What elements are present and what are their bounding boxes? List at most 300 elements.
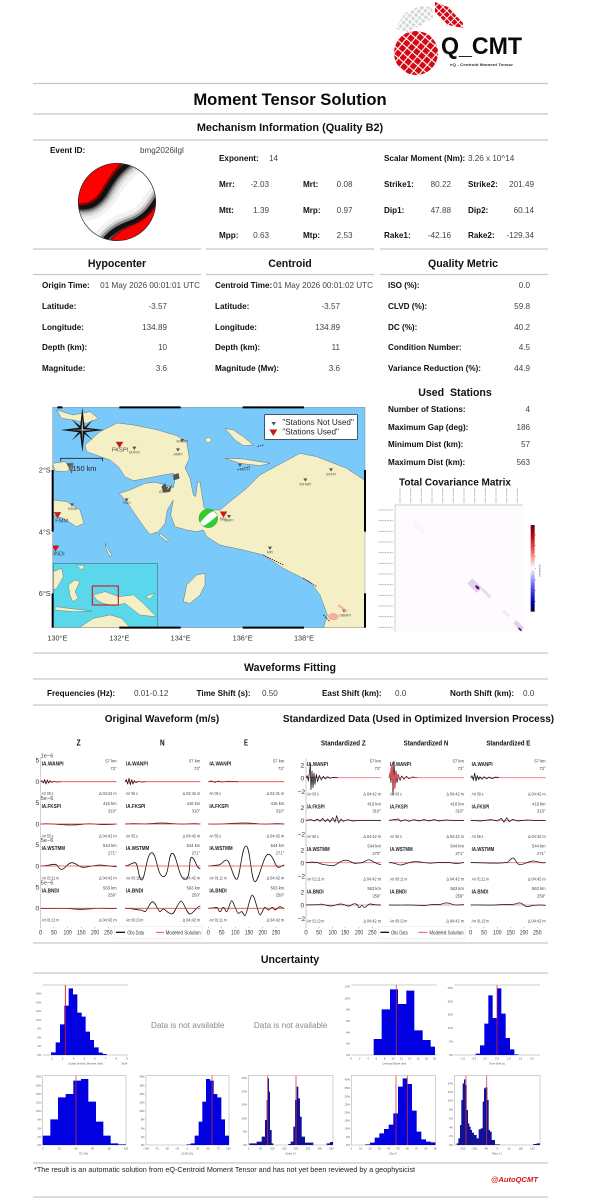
panel: used stations: Minimum Dist (km): bbox=[388, 440, 463, 449]
stations not used: YBYPI bbox=[240, 468, 250, 472]
histogram: dip: 30% bbox=[345, 1094, 351, 1098]
histogram: DC: 10% bbox=[36, 1109, 42, 1113]
chart: original waveforms: 5 bbox=[35, 800, 39, 807]
histogram: time shift: 0% bbox=[449, 1053, 454, 1057]
waveform: BNDI Z: IA.BNDI bbox=[42, 888, 59, 894]
histogram: DC: 15% bbox=[36, 1092, 42, 1096]
panel: hypocenter: Depth (km): bbox=[42, 343, 87, 352]
histogram: DC: 40 bbox=[75, 1147, 78, 1151]
heading: standardized data: Standardized Data (Used in Optimized Inversion Process) bbox=[283, 714, 554, 725]
waveform: standardized WSTMM E: IA.WSTMM bbox=[472, 847, 495, 853]
histogram: dip: 10 bbox=[359, 1147, 363, 1151]
histogram: strike: 25% bbox=[242, 1076, 248, 1080]
x axis ticks: 200 bbox=[520, 930, 529, 936]
waveform: WANPI N: Arr 09 s bbox=[126, 791, 138, 796]
note: data not available (ISO): Data is not available bbox=[151, 1021, 225, 1030]
legend: standardized waveform: Obs Data bbox=[391, 930, 408, 936]
legend: standardized waveform bbox=[378, 927, 465, 938]
waveform: standardized FKSPI E: 310° bbox=[537, 809, 546, 814]
panel: waveform fit parameters: Frequencies (Hz): bbox=[47, 689, 115, 698]
chart: standardized waveforms: 2 bbox=[300, 890, 304, 897]
panel: moment tensor values: 2.53 bbox=[337, 231, 353, 240]
panel: used stations: 186 bbox=[516, 423, 530, 432]
waveform: standardized WANPI N: Δ 04:42 m bbox=[446, 791, 464, 796]
waveform: standardized WSTMM N: IA.WSTMM bbox=[390, 847, 413, 853]
credit: @AutoQCMT: @AutoQCMT bbox=[491, 1175, 539, 1184]
x axis ticks: 250 bbox=[533, 930, 542, 936]
waveform: standardized FKSPI Z: 416 km bbox=[367, 801, 382, 806]
histogram: scalar seismic moment: 2 bbox=[51, 1056, 53, 1060]
title: Moment Tensor Solution bbox=[193, 90, 387, 109]
waveform: BNDI E: Arr 01:11 m bbox=[209, 918, 227, 923]
panel: waveform fit parameters: 0.0 bbox=[523, 689, 535, 698]
histogram: centroid depth bbox=[345, 985, 437, 1066]
chart: original waveforms: 0 bbox=[35, 863, 39, 870]
histogram: dip: 60 bbox=[406, 1147, 409, 1151]
panel: moment tensor values: 47.88 bbox=[431, 206, 451, 215]
chart: standardized waveforms: 2 bbox=[300, 762, 304, 769]
histogram: centroid depth: 10% bbox=[345, 996, 351, 1000]
waveform: FKSPI E: IA.FKSPI bbox=[209, 804, 229, 810]
waveform: WSTMM E: Arr 01:11 m bbox=[209, 875, 227, 880]
histogram: rake: 14% bbox=[448, 1081, 454, 1085]
waveform: standardized WANPI E: Arr 09 s bbox=[472, 791, 483, 796]
panel: moment tensor values: Mtp: bbox=[303, 231, 320, 240]
panel: hypocenter: Origin Time: bbox=[42, 281, 90, 290]
histogram: dip: 35% bbox=[345, 1086, 351, 1090]
histogram: CLVD: 5% bbox=[141, 1126, 145, 1130]
panel: centroid bbox=[215, 258, 373, 373]
waveform: WSTMM E: IA.WSTMM bbox=[209, 846, 233, 852]
map frame and tick labels: 2°S bbox=[39, 466, 51, 475]
panel: quality metric: DC (%): bbox=[388, 323, 417, 332]
waveform: WANPI N: 57 km bbox=[189, 759, 201, 764]
histogram: dip: 0% bbox=[346, 1143, 351, 1147]
histogram: centroid depth: 12 bbox=[400, 1056, 403, 1060]
chart: original waveforms: 5 bbox=[35, 884, 39, 891]
panel: used stations: Used Stations bbox=[418, 387, 492, 399]
stations not used: FAKI bbox=[123, 501, 131, 505]
panel: centroid: -3.57 bbox=[321, 302, 340, 311]
waveform: BNDI N: 563 km bbox=[187, 885, 201, 890]
waveform: WANPI N: Δ 04:42 m bbox=[183, 791, 201, 796]
histogram: rake: −100 bbox=[471, 1147, 478, 1151]
waveform: standardized BNDI E: 563 km bbox=[532, 886, 546, 891]
land: New Guinea bbox=[85, 423, 367, 628]
waveform: standardized WSTMM E bbox=[471, 844, 546, 881]
histogram: CLVD: 8% bbox=[141, 1118, 145, 1122]
waveform: standardized FKSPI E bbox=[471, 801, 546, 839]
waveform: standardized WANPI Z: IA.WANPI bbox=[307, 762, 328, 768]
panel: event id and beachball: Event ID: bbox=[50, 146, 85, 155]
panel: hypocenter: -3.57 bbox=[148, 302, 167, 311]
panel: centroid: 11 bbox=[332, 343, 340, 352]
waveform: WSTMM Z: Arr 01:11 m bbox=[42, 875, 59, 880]
panel: quality metric: ISO (%): bbox=[388, 281, 420, 290]
icon: event beachball bbox=[199, 509, 218, 528]
histogram: centroid depth: Centroid Depth (km) bbox=[382, 1062, 406, 1066]
waveform: WANPI E: Δ 04:41 m bbox=[267, 791, 285, 796]
histogram: time shift: 15% bbox=[448, 1013, 454, 1017]
map frame and tick labels bbox=[39, 407, 365, 642]
waveform: WSTMM Z bbox=[41, 843, 117, 880]
histogram: scalar seismic moment: 5 bbox=[84, 1056, 86, 1060]
histogram: CLVD: 20% bbox=[139, 1075, 145, 1079]
histogram: rake: 0% bbox=[449, 1143, 454, 1147]
panel: moment tensor values: -42.16 bbox=[428, 231, 451, 240]
waveform: standardized WSTMM E: 271° bbox=[537, 851, 546, 856]
panel: quality metric: 40.2 bbox=[514, 323, 530, 332]
chart: original waveforms: 1e−6 bbox=[41, 754, 53, 760]
x axis ticks: 250 bbox=[104, 930, 113, 936]
stations not used: MTMPI bbox=[299, 482, 311, 486]
waveform: FKSPI N bbox=[125, 801, 201, 838]
waveform: standardized WANPI Z: 57 km bbox=[370, 759, 382, 764]
waveform: WSTMM E: Δ 04:42 m bbox=[267, 875, 285, 880]
chart: standardized waveforms: −2 bbox=[298, 831, 305, 838]
histogram: dip: 20% bbox=[345, 1110, 351, 1114]
waveform: BNDI Z: 259° bbox=[108, 893, 117, 898]
stations not used: MPI bbox=[267, 551, 273, 555]
waveform: standardized FKSPI E: IA.FKSPI bbox=[472, 805, 490, 811]
stations not used bbox=[68, 439, 351, 618]
histogram: DC: 18% bbox=[36, 1083, 42, 1087]
histogram: centroid depth: 6% bbox=[346, 1019, 351, 1023]
waveform: standardized WANPI Z: 73° bbox=[375, 766, 381, 771]
panel: quality metric: 59.8 bbox=[514, 302, 530, 311]
map frame and tick labels: 132°E bbox=[109, 633, 129, 642]
waveform: BNDI N: 259° bbox=[192, 893, 201, 898]
chart: standardized waveforms: 0 bbox=[300, 776, 304, 783]
histogram: scalar seismic moment: Scalar Seismic Moment (Nm) bbox=[68, 1062, 103, 1066]
histogram: rake: 150 bbox=[530, 1147, 535, 1151]
land: other islands bbox=[53, 410, 330, 622]
waveform: WSTMM N: Δ 04:42 m bbox=[183, 875, 201, 880]
histogram: time shift: 25% bbox=[448, 986, 454, 990]
waveform: standardized BNDI Z: Arr 01:13 m bbox=[307, 919, 325, 924]
x axis ticks: 250 bbox=[368, 930, 377, 936]
waveform: standardized FKSPI E: Δ 04:42 m bbox=[528, 834, 546, 839]
chart: original waveforms: 0 bbox=[35, 779, 39, 786]
histogram: centroid depth: 0 bbox=[351, 1056, 353, 1060]
chart: total covariance matrix bbox=[378, 477, 542, 632]
histogram: scalar seismic moment bbox=[36, 985, 128, 1066]
waveform: standardized BNDI N: 259° bbox=[455, 893, 464, 898]
histogram: time shift bbox=[448, 985, 540, 1066]
waveform: standardized WSTMM E: 544 km bbox=[532, 844, 546, 849]
histogram: scalar seismic moment: 12% bbox=[36, 1009, 42, 1013]
panel: moment tensor values: Rake1: bbox=[384, 231, 411, 240]
waveform: standardized FKSPI N: IA.FKSPI bbox=[390, 805, 408, 811]
histogram: dip: 80 bbox=[425, 1147, 428, 1151]
histogram: CLVD: 15% bbox=[139, 1092, 145, 1096]
panel: moment tensor values: Dip1: bbox=[384, 206, 404, 215]
panel: moment tensor values: 1.39 bbox=[253, 206, 269, 215]
panel: centroid: Centroid Time: bbox=[215, 281, 272, 290]
histogram: dip: 40% bbox=[345, 1078, 351, 1082]
stations not used: SATPI bbox=[326, 472, 336, 476]
panel: moment tensor values: 60.14 bbox=[514, 206, 534, 215]
panel: centroid: Depth (km): bbox=[215, 343, 260, 352]
histogram: DC: DC (%) bbox=[79, 1152, 88, 1156]
waveform: standardized WSTMM N: Δ 04:42 m bbox=[446, 876, 464, 881]
histogram: centroid depth: 8 bbox=[384, 1056, 386, 1060]
panel: centroid: 3.6 bbox=[329, 364, 340, 373]
legend: "Stations Used" bbox=[282, 427, 339, 436]
panel: quality metric bbox=[388, 258, 530, 373]
histogram: centroid depth: 4% bbox=[346, 1030, 351, 1034]
chart: standardized waveforms: 0 bbox=[300, 860, 304, 867]
map frame and tick labels: 134°E bbox=[171, 633, 191, 642]
histogram: time shift: Time Shift (s) bbox=[489, 1062, 505, 1066]
waveform: WANPI N: IA.WANPI bbox=[126, 762, 148, 768]
waveform: BNDI E: Δ 04:42 m bbox=[267, 918, 285, 923]
waveform: WSTMM E: 271° bbox=[276, 850, 285, 855]
waveform: standardized WANPI Z: Δ 04:42 m bbox=[363, 791, 381, 796]
panel: uncertainty histograms right bbox=[345, 985, 540, 1156]
waveform: WANPI Z: 73° bbox=[110, 766, 117, 771]
stations not used: OBMPI bbox=[339, 614, 351, 618]
waveform: FKSPI Z: IA.FKSPI bbox=[42, 804, 61, 810]
stations used bbox=[52, 442, 227, 551]
panel: moment tensor values: Strike1: bbox=[384, 180, 414, 189]
panel: quality metric: Variance Reduction (%): bbox=[388, 364, 481, 373]
histogram: scalar seismic moment: 3 bbox=[62, 1056, 64, 1060]
waveform: standardized FKSPI N: 310° bbox=[455, 809, 464, 814]
waveform: standardized BNDI E: Arr 01:13 m bbox=[472, 919, 489, 924]
chart: standardized waveforms: 0 bbox=[300, 903, 304, 910]
waveform: WSTMM Z: IA.WSTMM bbox=[42, 846, 65, 852]
panel: waveform fit parameters: Time Shift (s): bbox=[196, 689, 251, 698]
histogram: time shift: 2.0 bbox=[530, 1056, 534, 1060]
chart: original waveforms: Z bbox=[77, 739, 81, 748]
chart: standardized waveforms: −2 bbox=[298, 789, 305, 796]
heading: uncertainty: Uncertainty bbox=[261, 954, 319, 966]
waveform: BNDI Z: 563 km bbox=[103, 885, 117, 890]
map: station locations: FMM bbox=[55, 518, 68, 524]
waveform: standardized BNDI N: IA.BNDI bbox=[390, 889, 407, 895]
x axis ticks: 150 bbox=[77, 930, 86, 936]
waveform: standardized FKSPI N: Δ 04:42 m bbox=[446, 834, 464, 839]
chart: original waveforms bbox=[35, 739, 285, 938]
histogram: rake: 0 bbox=[497, 1147, 499, 1151]
stations not used: BMPI bbox=[225, 518, 233, 522]
panel: used stations: Maximum Gap (deg): bbox=[388, 423, 468, 432]
map frame and tick labels: 138°E bbox=[294, 633, 314, 642]
histogram: centroid depth: 14 bbox=[408, 1056, 412, 1060]
waveform: FKSPI Z: Δ 04:42 m bbox=[99, 833, 117, 838]
waveform: FKSPI N: Arr 55 s bbox=[126, 833, 138, 838]
x axis ticks: 50 bbox=[219, 930, 225, 936]
x axis ticks: 0 bbox=[469, 930, 473, 936]
histogram: strike: 200 bbox=[294, 1147, 299, 1151]
waveform: WSTMM Z: 271° bbox=[108, 850, 117, 855]
panel: waveform fit parameters: 0.01-0.12 bbox=[134, 689, 169, 698]
x axis ticks: 150 bbox=[341, 930, 350, 936]
histogram: centroid depth: 18 bbox=[425, 1056, 428, 1060]
histogram: time shift: 0.5 bbox=[495, 1056, 499, 1060]
chart: total covariance matrix: Total Covariance Matrix bbox=[399, 477, 511, 488]
panel: moment tensor values: Exponent: bbox=[219, 154, 259, 163]
x axis ticks: 100 bbox=[231, 930, 240, 936]
panel: waveform fit parameters: 0.50 bbox=[262, 689, 278, 698]
waveform: standardized BNDI Z: 563 km bbox=[367, 886, 382, 891]
waveform: BNDI E bbox=[208, 885, 285, 923]
histogram: DC: 8% bbox=[37, 1118, 42, 1122]
panel: waveform fit parameters: East Shift (km): bbox=[322, 689, 382, 698]
legend: original waveform: Modeled Solution bbox=[166, 930, 201, 936]
x axis ticks: 100 bbox=[328, 930, 337, 936]
x axis ticks: 50 bbox=[316, 930, 322, 936]
panel: event id and beachball bbox=[50, 147, 184, 241]
panel: event id and beachball: bmg2026ilgl bbox=[140, 146, 184, 155]
histogram: CLVD: 0% bbox=[141, 1143, 145, 1147]
histogram: dip: 40 bbox=[387, 1147, 391, 1151]
histogram: time shift: 1.5 bbox=[518, 1056, 523, 1060]
waveform: standardized FKSPI Z: IA.FKSPI bbox=[307, 805, 325, 811]
waveform: FKSPI Z bbox=[41, 801, 117, 838]
waveform: BNDI Z: Arr 01:13 m bbox=[42, 918, 59, 923]
waveform: standardized BNDI E: Δ 04:42 m bbox=[528, 919, 546, 924]
chart: standardized waveforms: 2 bbox=[300, 847, 304, 854]
waveform: standardized BNDI N bbox=[389, 886, 465, 924]
histogram: CLVD: −75 bbox=[154, 1147, 159, 1151]
panel: moment tensor values: Mrp: bbox=[303, 206, 321, 215]
chart: original waveforms: 5 bbox=[35, 842, 39, 849]
histogram: rake: 50 bbox=[508, 1147, 511, 1151]
waveform: FKSPI E: 310° bbox=[276, 808, 285, 813]
panel: used stations: 57 bbox=[521, 440, 530, 449]
chart: standardized waveforms: Standardized N bbox=[404, 738, 448, 747]
chart: original waveforms: 5e−6 bbox=[41, 796, 53, 802]
histogram: CLVD: 25 bbox=[196, 1147, 200, 1151]
histogram: DC: 0 bbox=[42, 1147, 44, 1151]
waveform: standardized WSTMM Z: 270° bbox=[372, 851, 381, 856]
panel: hypocenter: 10 bbox=[158, 343, 167, 352]
histogram: DC bbox=[36, 1075, 129, 1156]
histogram: scalar seismic moment: 6% bbox=[37, 1035, 42, 1039]
waveform: WANPI Z: Δ 04:42 m bbox=[99, 791, 117, 796]
waveform: BNDI Z bbox=[41, 885, 117, 923]
logo: Q_CMT bbox=[394, 2, 522, 75]
waveform: BNDI E: IA.BNDI bbox=[209, 888, 227, 894]
histogram: DC: 60 bbox=[91, 1147, 95, 1151]
waveform: standardized WSTMM Z: 544 km bbox=[367, 844, 382, 849]
histogram: dip: 15% bbox=[345, 1119, 351, 1123]
waveform: FKSPI E: Arr 55 s bbox=[209, 833, 221, 838]
legend: "Stations Not Used" bbox=[282, 418, 354, 427]
histogram: DC: 5% bbox=[37, 1126, 42, 1130]
waveform: FKSPI E: Δ 04:42 m bbox=[267, 833, 285, 838]
histogram: centroid depth: 2% bbox=[346, 1042, 351, 1046]
map frame and tick labels: 4°S bbox=[39, 527, 51, 536]
histogram: scalar seismic moment: 6 bbox=[94, 1056, 96, 1060]
histogram: scalar seismic moment: 16% bbox=[36, 991, 42, 995]
waveform: standardized WANPI N: 73° bbox=[458, 766, 464, 771]
waveform: standardized FKSPI E: Arr 55 s bbox=[472, 834, 483, 839]
panel: hypocenter: Magnitude: bbox=[42, 364, 85, 373]
waveform: WANPI Z: 57 km bbox=[105, 759, 117, 764]
histogram: scalar seismic moment: 10% bbox=[36, 1018, 42, 1022]
waveform: WANPI Z: IA.WANPI bbox=[42, 762, 64, 768]
stations not used: BTPI bbox=[159, 490, 167, 494]
waveform: standardized WSTMM Z: Δ 04:42 m bbox=[363, 876, 381, 881]
panel: quality metric: 4.5 bbox=[519, 343, 530, 352]
waveform: standardized WSTMM Z: IA.WSTMM bbox=[307, 847, 330, 853]
waveform: standardized WSTMM Z: Arr 01:11 m bbox=[307, 876, 325, 881]
histogram: CLVD: 18% bbox=[139, 1083, 145, 1087]
waveform: standardized WANPI Z bbox=[306, 759, 382, 796]
waveform: WSTMM Z: 544 km bbox=[103, 843, 117, 848]
waveform: BNDI N: IA.BNDI bbox=[126, 888, 144, 894]
histogram: centroid depth: 10 bbox=[392, 1056, 395, 1060]
waveform: WSTMM N: 544 km bbox=[187, 843, 201, 848]
panel: centroid: 01 May 2026 00:01:02 UTC bbox=[273, 281, 373, 290]
panel: used stations: Number of Stations: bbox=[388, 405, 466, 414]
waveform: standardized WANPI Z: Arr 09 s bbox=[307, 791, 319, 796]
histogram: dip: 30 bbox=[378, 1147, 381, 1151]
histogram: dip: 25% bbox=[345, 1102, 351, 1106]
panel: centroid: Latitude: bbox=[215, 302, 249, 311]
waveform: WSTMM N: 271° bbox=[192, 850, 201, 855]
waveform: standardized WSTMM E: Arr 01:11 m bbox=[472, 876, 489, 881]
x axis ticks bbox=[304, 927, 542, 936]
histogram: time shift: 20% bbox=[448, 999, 454, 1003]
histogram: rake bbox=[448, 1076, 540, 1156]
panel: moment tensor values: Rake2: bbox=[468, 231, 495, 240]
histogram: strike: 100 bbox=[270, 1147, 275, 1151]
histogram: strike: 0% bbox=[243, 1143, 248, 1147]
waveform: standardized WANPI E: Δ 04:42 m bbox=[528, 791, 546, 796]
panel: quality metric: 0.0 bbox=[519, 281, 530, 290]
waveform: FKSPI N: Δ 04:42 m bbox=[183, 833, 201, 838]
histogram: strike: 5% bbox=[243, 1130, 248, 1134]
legend: original waveform bbox=[114, 927, 202, 938]
waveform: BNDI N: Arr 00:13 m bbox=[126, 918, 144, 923]
histogram: DC: 2% bbox=[37, 1135, 42, 1139]
histogram: CLVD: 75 bbox=[217, 1147, 220, 1151]
x axis ticks: 100 bbox=[63, 930, 72, 936]
panel: moment tensor values: 0.08 bbox=[337, 180, 353, 189]
panel: moment tensor values: Mtt: bbox=[219, 206, 234, 215]
waveform: standardized WANPI N: Arr 09 s bbox=[390, 791, 402, 796]
waveform: FKSPI Z: 310° bbox=[108, 808, 117, 813]
map frame and tick labels: 130°E bbox=[47, 633, 67, 642]
icon: beachball bbox=[78, 163, 156, 241]
x axis ticks: 200 bbox=[91, 930, 100, 936]
histogram: CLVD: 100 bbox=[226, 1147, 231, 1151]
histogram: CLVD: 50 bbox=[207, 1147, 210, 1151]
panel: quality metric: CLVD (%): bbox=[388, 302, 427, 311]
panel: centroid: Magnitude (Mw): bbox=[215, 364, 279, 373]
waveform: standardized WSTMM N: 544 km bbox=[450, 844, 465, 849]
panel: used stations: 563 bbox=[516, 458, 530, 467]
waveform: standardized BNDI N: Arr 00:13 m bbox=[390, 919, 408, 924]
waveform: WSTMM Z: Δ 04:42 m bbox=[99, 875, 117, 880]
histogram: strike: Strike (°) bbox=[285, 1152, 296, 1156]
scale bar: 150 km bbox=[72, 464, 96, 473]
histogram: dip: 10% bbox=[345, 1127, 351, 1131]
chart: standardized waveforms: −2 bbox=[298, 874, 305, 881]
waveform: BNDI E: 259° bbox=[276, 893, 285, 898]
panel: moment tensor values: Strike2: bbox=[468, 180, 498, 189]
waveform: FKSPI N: 416 km bbox=[187, 801, 201, 806]
heading: original waveform: Original Waveform (m/s) bbox=[105, 714, 219, 725]
x axis ticks: 150 bbox=[245, 930, 254, 936]
stations not used: MANPI bbox=[177, 440, 188, 444]
chart: original waveforms: E bbox=[244, 739, 249, 748]
histogram: centroid depth: 20 bbox=[433, 1056, 437, 1060]
